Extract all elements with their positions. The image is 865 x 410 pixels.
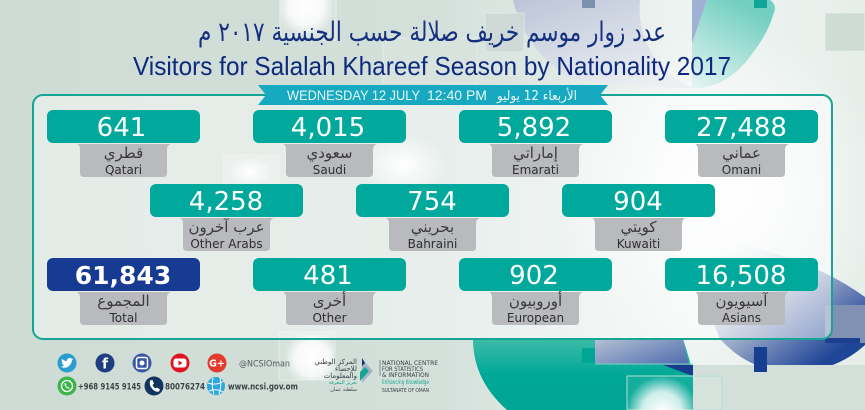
card: Other: أخرى <box>313 291 346 310</box>
logo: Arabic name: والمعلومات <box>324 372 357 380</box>
card: Saudi: 4,015 <box>291 113 365 143</box>
card: Asians: آسيويون <box>716 292 768 310</box>
card: Emarati: 5,892 <box>497 113 571 143</box>
card: European: أوروبيون <box>509 291 562 310</box>
logo: NCSI <box>314 358 438 394</box>
logo: English name <box>382 359 438 394</box>
icon: phone <box>144 376 164 396</box>
card: Other Arabs: عرب آخرون <box>188 218 265 236</box>
logo: English name: SULTANATE OF OMAN <box>382 388 429 394</box>
card: Saudi: Saudi <box>313 163 346 177</box>
card: Bahraini: بحريني <box>411 218 454 237</box>
card: Other Arabs: 4,258 <box>189 187 263 217</box>
card: Qatari: 641 <box>97 113 146 143</box>
logo: Arabic name: المركز الوطني <box>314 358 357 366</box>
card: Qatari <box>47 110 200 177</box>
card: Omani: Omani <box>722 163 761 177</box>
title: Arabic: عدد زوار موسم خريف صلالة حسب الجنسية ٢٠١٧ م <box>198 17 666 48</box>
icon: whatsapp <box>58 376 76 396</box>
card: Bahraini: Bahraini <box>408 237 457 251</box>
card: Asians: Asians <box>722 311 761 325</box>
card: Saudi: سعودي <box>307 144 352 163</box>
card: Qatari: قطري <box>104 144 143 163</box>
card: Saudi <box>253 110 406 177</box>
logo: mark <box>360 358 373 383</box>
card: Omani <box>665 110 818 177</box>
logo: Arabic name: تعزيز المعرفة <box>329 380 358 386</box>
card: Other: 481 <box>303 261 353 291</box>
phone number: 80076274 <box>165 382 205 392</box>
card: Bahraini <box>356 184 509 251</box>
logo: English name: NATIONAL CENTRE <box>382 359 438 367</box>
card: European: 902 <box>509 261 559 291</box>
logo: Arabic name: سلطنة عمان <box>330 387 357 393</box>
website: www.ncsi.gov.om <box>228 382 298 392</box>
social icons row <box>58 354 290 372</box>
date ribbon: الأربعاء 12 يوليو <box>496 87 577 104</box>
date ribbon: WEDNESDAY 12 JULY <box>287 87 421 103</box>
card: Total: المجموع <box>97 292 150 310</box>
card: Qatari: Qatari <box>105 163 142 177</box>
main panel <box>33 95 832 339</box>
card: Omani: عماني <box>722 144 761 163</box>
logo: Arabic name: للإحصاء <box>335 365 357 373</box>
card: Asians: 16,508 <box>696 261 786 291</box>
logo: English name: FOR STATISTICS <box>382 365 423 373</box>
card: Bahraini: 754 <box>407 187 457 217</box>
card: Total: 61,843 <box>75 261 171 290</box>
card: Other: Other <box>312 311 347 325</box>
card: European <box>459 258 612 325</box>
handle: @NCSIOman <box>239 360 290 370</box>
logo: English name: & INFORMATION <box>382 371 429 379</box>
card: Kuwaiti: 904 <box>613 187 663 217</box>
date ribbon: 12:40 PM <box>427 87 487 103</box>
icon: google plus: G+ <box>209 358 225 370</box>
card: Omani: 27,488 <box>696 113 787 143</box>
card: Kuwaiti: Kuwaiti <box>617 237 660 251</box>
date ribbon <box>258 85 608 105</box>
icon: twitter <box>58 354 76 372</box>
card: Asians <box>665 258 818 325</box>
logo: English name: Enhancing Knowledge <box>382 379 429 386</box>
card: Kuwaiti <box>562 184 715 251</box>
card: Emarati <box>459 110 612 177</box>
card: Other Arabs: Other Arabs <box>190 237 263 251</box>
icon: globe <box>207 377 225 395</box>
card: Total: Total <box>108 311 138 325</box>
icon: google plus <box>208 354 226 372</box>
whatsapp number: +968 9145 9145 <box>78 382 141 392</box>
card: European: European <box>507 311 564 325</box>
icon: youtube <box>170 354 190 372</box>
card: Emarati: إماراتي <box>513 144 558 163</box>
contact row <box>58 376 298 396</box>
title: English: Visitors for Salalah Khareef Season by Nationality 2017 <box>133 51 731 81</box>
card: Total <box>47 258 200 325</box>
icon: instagram <box>132 354 152 372</box>
icon: facebook: f <box>102 356 109 372</box>
card: Kuwaiti: كويتي <box>620 218 657 237</box>
card: Emarati: Emarati <box>512 163 559 177</box>
card: Other Arabs <box>150 184 303 251</box>
icon: facebook <box>96 354 114 372</box>
card: Other <box>253 258 406 325</box>
logo: Arabic name <box>314 358 358 393</box>
